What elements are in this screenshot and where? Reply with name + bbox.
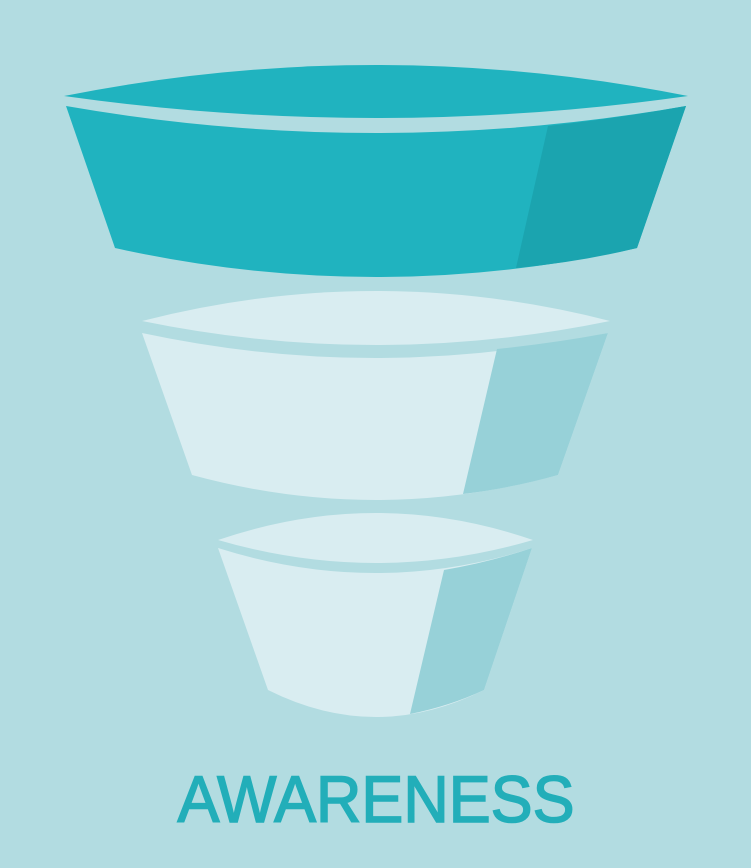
funnel bottom section	[218, 513, 533, 717]
shade 1	[516, 106, 686, 268]
shade 3	[410, 548, 532, 714]
body 1	[66, 106, 686, 277]
lens top 1	[64, 65, 688, 118]
shade 2	[463, 333, 608, 494]
body 3	[218, 548, 532, 717]
funnel middle section	[142, 291, 610, 500]
lens top 3	[218, 513, 533, 563]
lens top 2	[142, 291, 610, 345]
title: AWARENESS: AWARENESS	[178, 762, 574, 836]
funnel top section	[64, 65, 688, 277]
body 2	[142, 333, 608, 500]
